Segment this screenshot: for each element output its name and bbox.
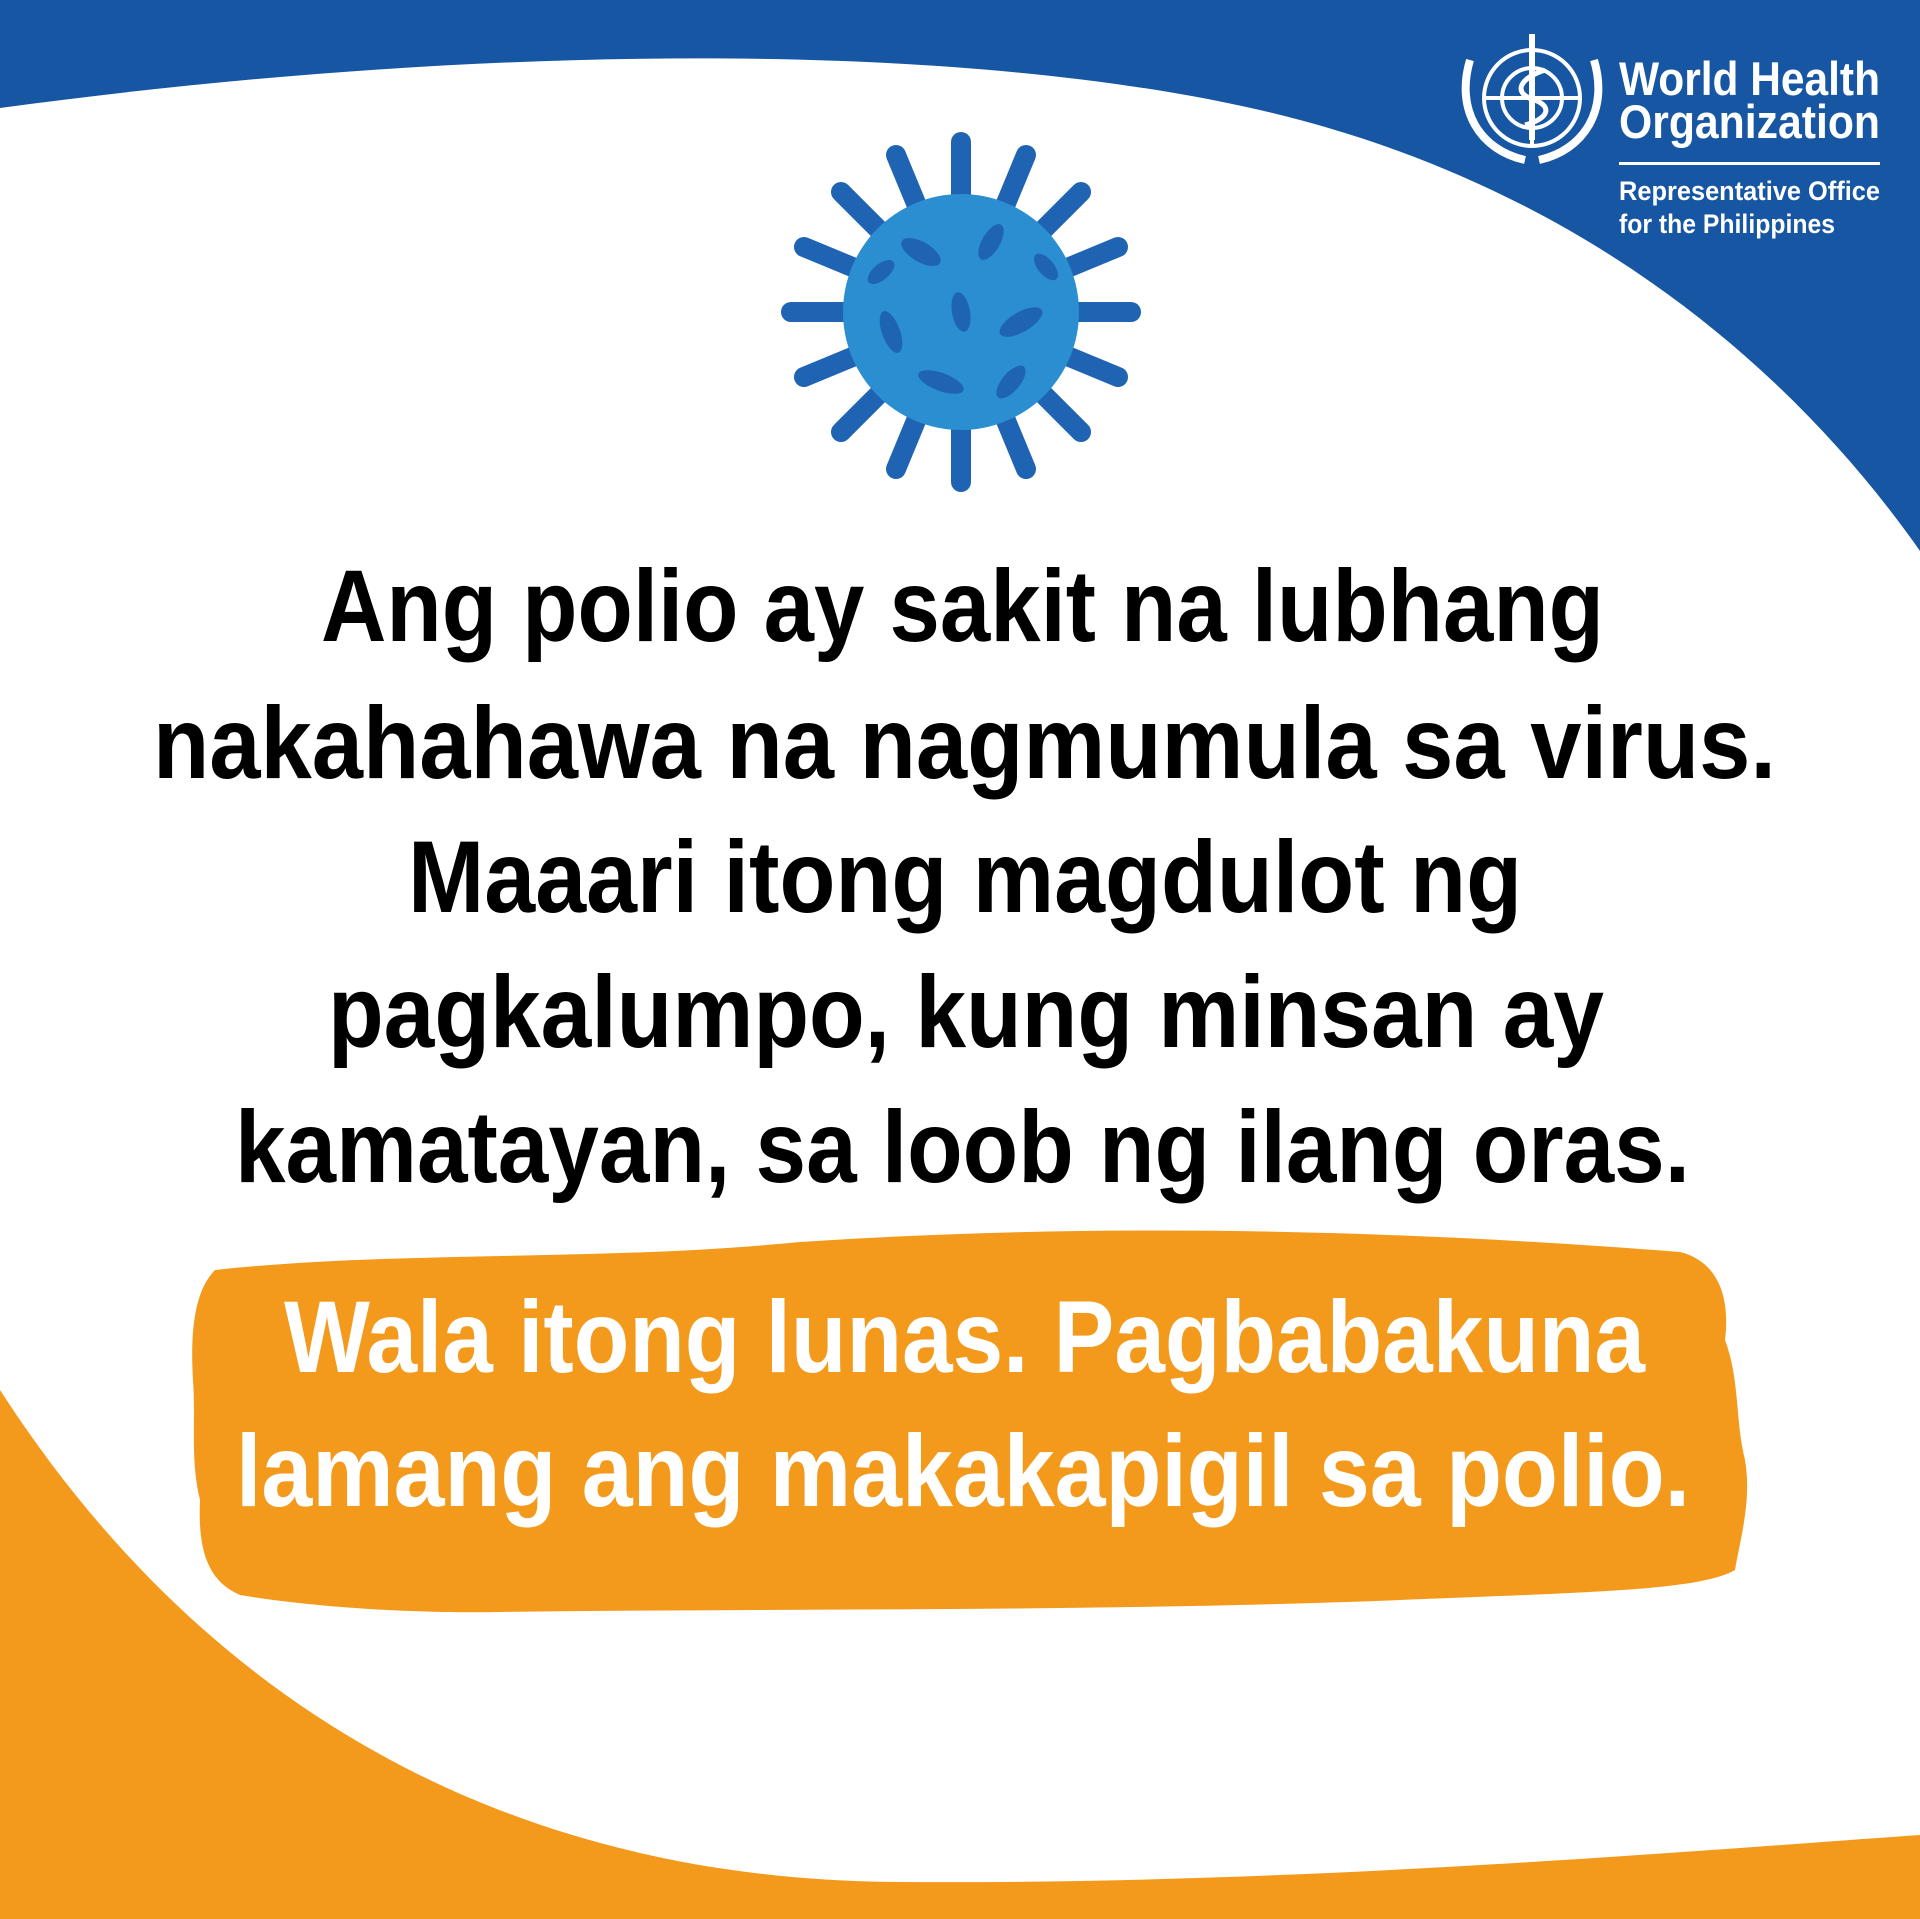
callout: orange blob with message: lamang ang makakapigil sa polio. — [236, 1414, 1690, 1528]
main text block: kamatayan, sa loob ng ilang oras. — [235, 1090, 1690, 1204]
logo: WHO: for the Philippines — [1619, 209, 1835, 239]
background: orange bottom band — [0, 1390, 1920, 1919]
main text block: Maaari itong magdulot ng — [408, 820, 1522, 934]
icon: WHO emblem — [1466, 34, 1598, 160]
logo: WHO: Organization — [1619, 95, 1880, 148]
main text block — [153, 549, 1776, 1204]
main text block: Ang polio ay sakit na lubhang — [321, 549, 1604, 663]
icon: virus — [791, 142, 1131, 482]
main text block: pagkalumpo, kung minsan ay — [328, 955, 1604, 1069]
callout: orange blob with message: Wala itong lunas. Pagbabakuna — [284, 1280, 1646, 1394]
callout: orange blob with message — [192, 1231, 1747, 1612]
background: blue top band — [0, 0, 1920, 551]
logo: WHO — [1466, 34, 1880, 239]
main text block: nakahahawa na nagmumula sa virus. — [153, 686, 1776, 800]
logo: WHO: Representative Office — [1619, 176, 1880, 206]
logo text: World Health — [1619, 52, 1880, 105]
